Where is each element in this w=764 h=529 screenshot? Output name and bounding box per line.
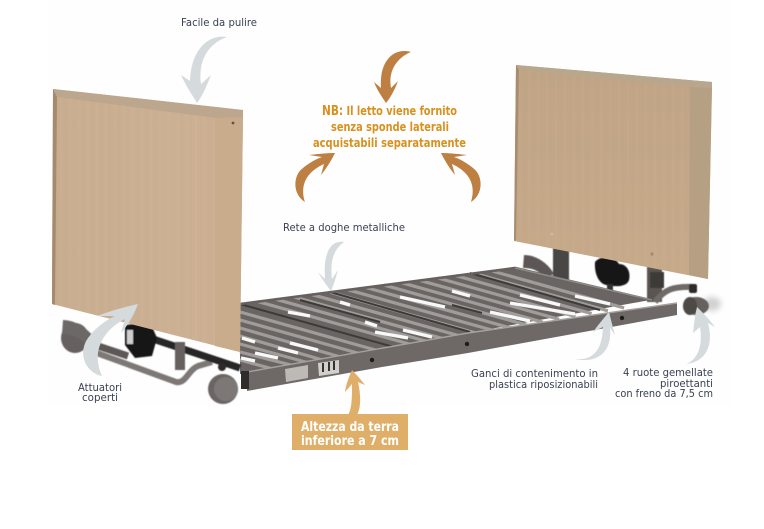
callout: Altezza da terra — [292, 414, 408, 450]
label: 4 ruote gemellate — [615, 366, 713, 400]
note: sponde laterali — [313, 104, 466, 150]
right headboard — [514, 65, 712, 279]
arrow: Ganci — [574, 312, 615, 360]
label: Attuatori coperti: coperti — [82, 391, 118, 404]
front side rail — [241, 303, 677, 391]
callout: Altezza da terra: Altezza da terra — [301, 419, 399, 435]
arrow: ruote — [686, 307, 715, 364]
label: 4 ruote gemellate: 4 ruote gemellate — [623, 366, 713, 379]
arrow: Altezza — [345, 370, 365, 415]
label: 4 ruote gemellate: piroettanti — [660, 377, 713, 390]
note: sponde laterali: NB: Il letto viene fornito — [322, 104, 457, 119]
label: Ganci di contenimento — [471, 367, 598, 391]
label: Rete a doghe metalliche: Rete a doghe metalliche — [283, 221, 405, 234]
arrow: right brown — [441, 153, 481, 202]
arrow: left brown — [295, 153, 335, 202]
label: Facile da pulire: Facile da pulire — [181, 16, 257, 29]
label: Attuatori coperti — [78, 381, 122, 404]
near end hardware — [61, 320, 240, 404]
arrow: Rete — [318, 242, 344, 291]
label: Attuatori coperti: Attuatori — [78, 381, 122, 394]
bed — [52, 65, 721, 404]
label: 4 ruote gemellate: con freno da 7,5 cm — [615, 387, 713, 400]
slatted deck — [240, 268, 652, 374]
arrow: Facile da pulire — [181, 37, 227, 103]
arrow: Attuatori — [83, 304, 138, 376]
note: sponde laterali: senza sponde laterali — [331, 120, 449, 134]
callout: Altezza da terra: inferiore a 7 cm — [301, 433, 399, 449]
note: sponde laterali: acquistabili separatamente — [313, 136, 466, 150]
far end hardware — [523, 248, 721, 315]
label: Ganci di contenimento: plastica riposizionabili — [489, 378, 598, 391]
arrow: top brown — [374, 51, 411, 103]
label: Ganci di contenimento: Ganci di contenimento in — [471, 367, 598, 380]
left headboard — [52, 89, 243, 352]
